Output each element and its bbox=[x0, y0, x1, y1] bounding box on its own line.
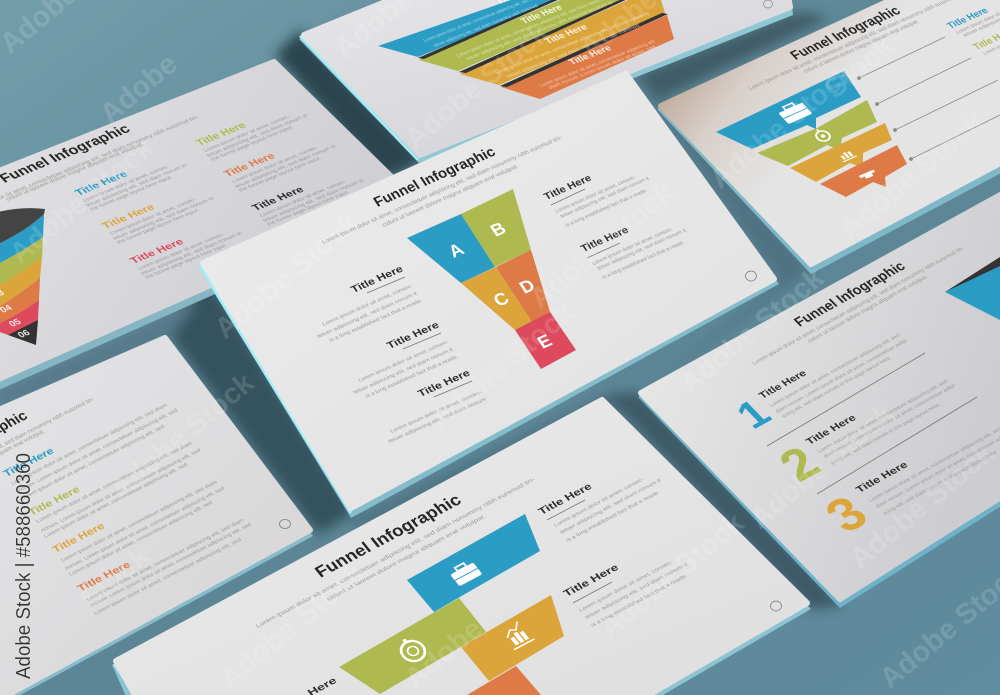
list item 2: 2 bbox=[768, 437, 831, 491]
text block: red: the funnel page layout here input. bbox=[144, 243, 229, 280]
text block: red bbox=[128, 231, 244, 280]
text block: right one: Lorem ipsum dolor sit amet, consec- bbox=[553, 476, 646, 529]
text block: blue: Lorem ipsum dolor sit amet, consectetuer adipiscing elit, sed bbox=[20, 424, 166, 502]
text block: orange: Title Here bbox=[76, 559, 134, 594]
intro copy: cidunt ut laoreet dolore magna aliquam erat volutpat. bbox=[326, 514, 488, 603]
page number badge bbox=[770, 601, 782, 611]
intro copy: Lorem ipsum dolor sit amet, consectetuer adipiscing elit, sed diam nonummy nibh euismod tin- bbox=[752, 246, 966, 366]
list item 1 bbox=[727, 333, 910, 436]
segment D bbox=[496, 250, 550, 322]
text block: blue: Title Here bbox=[2, 446, 57, 479]
band titles and copy: Title Here bbox=[519, 3, 565, 26]
stock watermark pattern: Stock bbox=[819, 30, 901, 105]
band titles and copy: tetuer adipiscing elit, sed diam nonummy nibh euismod tincidunt ut bbox=[465, 0, 615, 61]
heading: Funnel Infographic bbox=[0, 122, 134, 186]
band titles and copy: diam nonum. Lorem ipsum dolor sit amet, sed bbox=[547, 44, 658, 90]
band titles and copy: Lorem ipsum dolor sit amet, consectetuer adipiscing elit, sed diam nonummy bbox=[494, 11, 651, 75]
text block: yellow: Lorem ipsum dolor sit amet, consectetuer adipiscing elit, sed diam bbox=[60, 479, 219, 564]
text block: left two: is a long established fact that a reade. bbox=[364, 354, 460, 400]
text block: right two: Lorem ipsum dolor sit amet, consec- bbox=[591, 226, 674, 267]
text block: green: the funnel page layout here input. bbox=[210, 125, 295, 162]
band titles and copy: Title Here bbox=[567, 43, 614, 67]
segment A bbox=[407, 214, 495, 283]
stock watermark pattern: Adobe bbox=[399, 613, 489, 695]
text block: yellow: tetuer adipiscing elit, sed diam nonum in bbox=[112, 196, 216, 241]
stock watermark pattern: Adobe Stock bbox=[4, 131, 161, 270]
text block: yellow bbox=[100, 196, 216, 245]
panel: lower left slide, text list bbox=[0, 338, 313, 695]
text block: yellow: Lorem ipsum dolor sit amet, consectetuer adipiscing elit, sed bbox=[68, 500, 214, 578]
intro copy bbox=[255, 477, 537, 630]
text block: left three: Title Here bbox=[416, 368, 473, 400]
list item 1: diam nonum. Lorem ipsum dolor sit amet, consectetuer adipi- bbox=[775, 337, 910, 414]
text block: green: Title Here bbox=[27, 484, 83, 518]
text block: right two: tetuer adipiscing elit, sed diam nonum it bbox=[596, 228, 688, 272]
text block: right two: is a long established fact that a reade. bbox=[601, 240, 686, 281]
text block: right one: Title Here bbox=[537, 481, 595, 517]
text block: dark: Title Here bbox=[250, 185, 307, 213]
band titles and copy: Title Here bbox=[543, 22, 590, 46]
text block: yellow bbox=[51, 479, 226, 578]
stock watermark pattern: Adobe Stock bbox=[704, 56, 861, 195]
list item 2: Lorem ipsum dolor sit amet, consectetuer adipiscing elit, sed bbox=[817, 379, 950, 454]
text block: right one: Lorem ipsum dolor sit amet, consec- bbox=[554, 174, 637, 215]
text block: blue bbox=[2, 402, 179, 502]
text block: red: Lorem ipsum dolor sit amet, consec- bbox=[137, 232, 226, 271]
cone funnel bbox=[0, 208, 45, 345]
segment B: B bbox=[487, 218, 510, 240]
funnel block: green with stopwatch bbox=[339, 598, 486, 694]
text block: right two: Title Here bbox=[562, 562, 622, 599]
text block: blue: nonum. Lorem ipsum dolor sit amet, consectetuer adipiscing elit, sed bbox=[17, 408, 179, 494]
list item 2: diam nonum. Lorem ipsum dolor sit amet, consectetuer adipi- bbox=[823, 382, 958, 459]
text block: right one: is a long established fact that a reade. bbox=[564, 188, 649, 229]
text block: yellow: Title Here bbox=[100, 202, 158, 231]
page number badge bbox=[764, 0, 772, 8]
text block: green: Lorem ipsum dolor sit amet, consectetuer adipiscing elit, sed diam bbox=[35, 440, 194, 525]
text block: blue: the funnel page layout here input. bbox=[89, 175, 174, 212]
text block: right one bbox=[537, 476, 663, 544]
text block: dark: the funnel page layout here input. bbox=[266, 190, 351, 227]
band titles and copy: Lorem ipsum dolor sit amet, consectetuer adipiscing elit bbox=[538, 39, 657, 88]
funnel band: yellow bbox=[460, 0, 665, 85]
text block: right two bbox=[562, 559, 690, 629]
vertical stock credit: Adobe Stock | #588660360 bbox=[13, 453, 35, 679]
funnel band: orange bbox=[501, 15, 674, 99]
text block: orange bbox=[76, 517, 253, 617]
segment E: E bbox=[534, 331, 556, 352]
text block: left three: Lorem ipsum dolor sit amet, consec- bbox=[389, 390, 483, 435]
text block: green: Lorem ipsum dolor sit amet, consectetuer adipiscing elit, sed bbox=[43, 462, 189, 540]
text block: green bbox=[27, 440, 202, 540]
funnel block: blue with briefcase bbox=[407, 514, 540, 612]
panel: lower right slide, numbered list bbox=[638, 193, 1000, 608]
intro copy: cidunt ut laoreet dolore magna aliquam erat volutpat. bbox=[381, 164, 520, 229]
funnel block: yellow with chart bbox=[461, 595, 564, 681]
side titles: Title Here bbox=[945, 6, 991, 31]
text block: dark: tetuer adipiscing elit, sed diam nonum in bbox=[262, 178, 366, 223]
stock watermark pattern: Adobe bbox=[94, 48, 184, 130]
text block: left one: Lorem ipsum dolor sit amet, consec- bbox=[321, 283, 415, 328]
funnel fragment bbox=[945, 257, 1000, 320]
cone funnel: 05 bbox=[7, 317, 24, 329]
text block: blue: Title Here bbox=[73, 169, 131, 198]
text block: orange: Lorem ipsum dolor sit amet, consectetuer adipiscing elit, sed diam bbox=[85, 517, 246, 603]
text block: right one: is a long established fact that a reade. bbox=[565, 490, 661, 544]
list item 1: scing elit, sed diam nonum in this page layout here. bbox=[781, 355, 893, 419]
text block: right one: Title Here bbox=[542, 173, 594, 203]
text block: left two: tetuer adipiscing elit, sed diam nonum it bbox=[352, 347, 455, 396]
text block: green: Lorem ipsum dolor sit amet, consec- bbox=[203, 114, 292, 153]
stock watermark pattern: Adobe Stock bbox=[104, 366, 261, 505]
list item 2 bbox=[768, 379, 958, 491]
text block: left two: Title Here bbox=[385, 320, 442, 352]
funnel block: orange bbox=[467, 666, 541, 695]
stock watermark pattern: Adobe Stock bbox=[214, 556, 371, 695]
stock watermark pattern: Adobe Stock bbox=[674, 261, 831, 400]
stock watermark pattern: Adobe Stock bbox=[399, 16, 556, 155]
text block: left one: tetuer adipiscing elit, sed diam nonum it bbox=[316, 291, 419, 340]
cast shadows bbox=[0, 12, 845, 610]
text block: dark bbox=[250, 178, 366, 227]
segment A: A bbox=[445, 239, 468, 261]
text block: left one bbox=[316, 264, 424, 344]
list item 3: Title Here bbox=[854, 460, 911, 495]
text block: red: tetuer adipiscing elit, sed diam nonum in bbox=[140, 231, 244, 276]
text block: blue bbox=[73, 163, 189, 212]
segment B bbox=[461, 189, 531, 267]
stock watermark pattern: Adobe Stock bbox=[594, 506, 751, 645]
text block: right one bbox=[542, 173, 651, 229]
funnel step: yellow with chart bbox=[790, 123, 892, 182]
text block: blue: Lorem ipsum dolor sit amet, consec- bbox=[82, 164, 171, 203]
list item 1: Lorem ipsum dolor sit amet, consectetuer adipiscing elit, sed bbox=[769, 333, 902, 408]
page number badge bbox=[280, 520, 290, 528]
side titles bbox=[945, 6, 1000, 56]
text block: left three: tetuer adipiscing elit, sed diam nonum bbox=[387, 397, 488, 445]
stock watermark pattern: Adobe Stock bbox=[524, 176, 681, 315]
text block: right two bbox=[579, 225, 688, 281]
text block: orange: nonum. Lorem ipsum dolor sit amet, consectetuer adipiscing elit, sed bbox=[89, 522, 253, 609]
text block: yellow: Title Here bbox=[51, 521, 108, 555]
text block: right two: Lorem ipsum dolor sit amet, consec- bbox=[578, 559, 675, 614]
stock watermark pattern: Stock bbox=[74, 540, 156, 615]
panel: left slide, cone funnel bbox=[0, 62, 412, 392]
stock watermark pattern: Adobe Stock bbox=[209, 206, 366, 345]
intro copy: cidunt ut laoreet dolore magna aliquam erat volutpat. bbox=[803, 19, 921, 74]
text block: orange: the funnel page layout here input. bbox=[238, 156, 323, 193]
heading: Funnel Infographic bbox=[311, 491, 465, 581]
text block: yellow: the funnel page layout here input. bbox=[116, 208, 201, 245]
funnel step: green with stopwatch bbox=[757, 100, 877, 166]
text block: orange: Lorem ipsum dolor sit amet, consectetuer adipiscing elit, sed bbox=[93, 537, 243, 617]
funnel band: blue bbox=[378, 0, 558, 57]
intro copy: cidunt ut laoreet dolore magna aliquam erat volutpat. bbox=[5, 142, 146, 202]
page number badge bbox=[746, 271, 756, 281]
list item 3 bbox=[814, 426, 1000, 543]
intro copy: Lorem ipsum dolor sit amet, consectetuer adipiscing elit, sed diam nonummy nibh euismod tin- bbox=[321, 135, 563, 246]
text block: right two: is a long established fact that a reade. bbox=[590, 573, 689, 629]
heading: Funnel Infographic bbox=[791, 259, 909, 330]
list item 3: scing elit, sed diam nonum in this page layout here. bbox=[882, 449, 1000, 516]
list item 1: 1 bbox=[727, 391, 780, 436]
text block: orange bbox=[222, 144, 338, 193]
segment E bbox=[515, 312, 576, 369]
text block: orange: Title Here bbox=[222, 151, 278, 179]
text block: right one: tetuer adipiscing elit, sed diam nonum it bbox=[559, 478, 663, 536]
funnel step: blue with briefcase bbox=[716, 71, 861, 149]
text block: dark: Lorem ipsum dolor sit amet, consec- bbox=[259, 179, 348, 218]
panel: top slide, banded funnel bbox=[299, 0, 793, 163]
list item 2: scing elit, sed diam nonum in this page layout here. bbox=[830, 402, 942, 466]
text block: orange: tetuer adipiscing elit, sed diam nonum in bbox=[234, 144, 338, 189]
list item 2: Title Here bbox=[804, 413, 859, 447]
band titles and copy bbox=[422, 0, 658, 90]
leader lines bbox=[858, 37, 1000, 160]
band titles and copy: tetuer adipiscing elit, sed diam nonummy nibh euismod bbox=[505, 23, 642, 79]
text block: left one: is a long established fact that a reade. bbox=[328, 298, 424, 344]
stock watermark pattern: Adobe Stock bbox=[844, 436, 1000, 575]
heading: Funnel Infographic bbox=[371, 144, 499, 210]
text block: orange: Lorem ipsum dolor sit amet, consec- bbox=[231, 145, 320, 184]
list item 3: 3 bbox=[814, 487, 880, 543]
stock watermark pattern: Adobe Stock bbox=[834, 106, 991, 245]
band separators bbox=[418, 0, 668, 87]
band titles and copy: tetuer adipiscing elit, sed diam nonummy nibh euismod bbox=[432, 3, 540, 48]
stock watermark pattern: Adobe Stock bbox=[744, 396, 901, 535]
text block: left two: Lorem ipsum dolor sit amet, consec- bbox=[357, 339, 451, 384]
text block: blue: Lorem ipsum dolor sit amet, consectetuer adipiscing elit, sed diam bbox=[10, 402, 169, 487]
segment D: D bbox=[516, 275, 539, 297]
text block: left three bbox=[387, 368, 488, 445]
segment C: C bbox=[490, 288, 513, 310]
text block: red: Title Here bbox=[128, 237, 187, 266]
text block: green: nonum. Lorem ipsum dolor sit amet, consectetuer adipiscing elit, sed bbox=[40, 448, 202, 534]
text block: left two bbox=[352, 320, 460, 400]
funnel chart A to E bbox=[407, 189, 576, 369]
text block: blue: tetuer adipiscing elit, sed diam nonum in bbox=[85, 163, 189, 208]
panel: upper right slide, arrow funnel bbox=[657, 0, 1000, 274]
text block: right one: tetuer adipiscing elit, sed diam nonum it bbox=[559, 176, 651, 220]
cone funnel: 06 bbox=[16, 328, 33, 340]
list item 3: Lorem ipsum dolor sit amet, consectetuer adipiscing elit, sed bbox=[868, 426, 1000, 503]
intro copy: cidunt ut laoreet dolore magna aliquam erat volutpat. bbox=[807, 274, 930, 344]
text block: green: Title Here bbox=[194, 121, 249, 148]
stock watermark pattern: Adobe Stock bbox=[424, 296, 581, 435]
text block: green bbox=[194, 113, 310, 162]
funnel step: orange with handshake bbox=[820, 145, 907, 197]
text block: right two: tetuer adipiscing elit, sed diam nonum it bbox=[584, 562, 690, 621]
panel: bottom slide, icon funnel bbox=[112, 400, 811, 695]
text block: right two: Title Here bbox=[579, 225, 631, 255]
funnel band: green bbox=[419, 0, 622, 71]
text block: green: tetuer adipiscing elit, sed diam nonum in bbox=[206, 113, 310, 158]
text block: yellow: nonum. Lorem ipsum dolor sit amet, consectetuer adipiscing elit, sed bbox=[64, 486, 226, 572]
panel: center slide, lettered funnel bbox=[198, 74, 779, 518]
list item 1: Title Here bbox=[757, 368, 810, 401]
text block: left one: Title Here bbox=[349, 264, 406, 296]
segment C bbox=[461, 267, 532, 330]
intro copy: Lorem ipsum dolor sit amet, consectetuer adipiscing elit, sed diam nonummy nibh euismod tin- bbox=[255, 477, 537, 630]
text block: yellow: Lorem ipsum dolor sit amet, consec- bbox=[109, 197, 198, 236]
